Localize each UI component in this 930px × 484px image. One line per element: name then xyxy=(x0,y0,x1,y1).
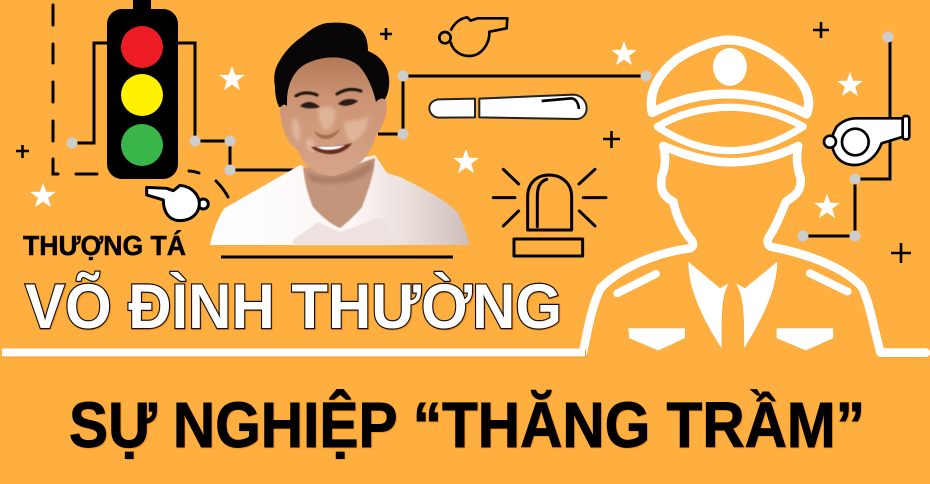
photo: face highlights xyxy=(292,107,368,152)
icon: white whistle, lower left xyxy=(147,185,208,221)
photo: neck xyxy=(303,158,375,228)
photo: mouth xyxy=(311,143,352,154)
circuit wires xyxy=(72,37,890,236)
circuit nodes xyxy=(66,32,894,242)
photo: teeth xyxy=(316,145,345,150)
icon: plus signs xyxy=(16,22,911,263)
officer: collar and tie xyxy=(688,262,777,348)
icon: white whistle, right xyxy=(824,116,909,165)
photo: hair xyxy=(274,23,389,107)
icon: siren xyxy=(493,169,606,256)
black line under photo xyxy=(221,256,453,258)
photo: eyes xyxy=(300,99,358,108)
photo: collar fold xyxy=(293,217,393,245)
icon: outline whistle, top xyxy=(439,17,507,56)
icon: stars xyxy=(30,41,863,218)
officer: epaulets xyxy=(617,273,848,293)
photo: eyebrows xyxy=(296,89,361,96)
photo: shirt xyxy=(210,155,470,245)
icon: officer xyxy=(583,40,926,353)
photo: nose shadow xyxy=(314,128,340,139)
officer: cap crown xyxy=(651,40,809,114)
photo: face xyxy=(280,57,387,176)
headline: SỰ NGHIỆP “THĂNG TRẦM” xyxy=(69,388,865,461)
title: name: VÕ ĐÌNH THƯỜNG xyxy=(25,271,562,342)
officer: head and shoulders xyxy=(583,146,926,353)
officer: badge xyxy=(713,48,747,86)
photo: neck shadow xyxy=(306,160,373,184)
dashed road line xyxy=(53,5,228,197)
title: rank: THƯỢNG TÁ xyxy=(23,230,186,261)
photo: portrait xyxy=(210,23,470,245)
icon: baton xyxy=(429,95,587,119)
officer: pockets xyxy=(628,328,833,351)
officer: visor xyxy=(657,107,803,151)
baseline rule xyxy=(2,348,585,356)
icon: traffic light xyxy=(107,0,178,179)
